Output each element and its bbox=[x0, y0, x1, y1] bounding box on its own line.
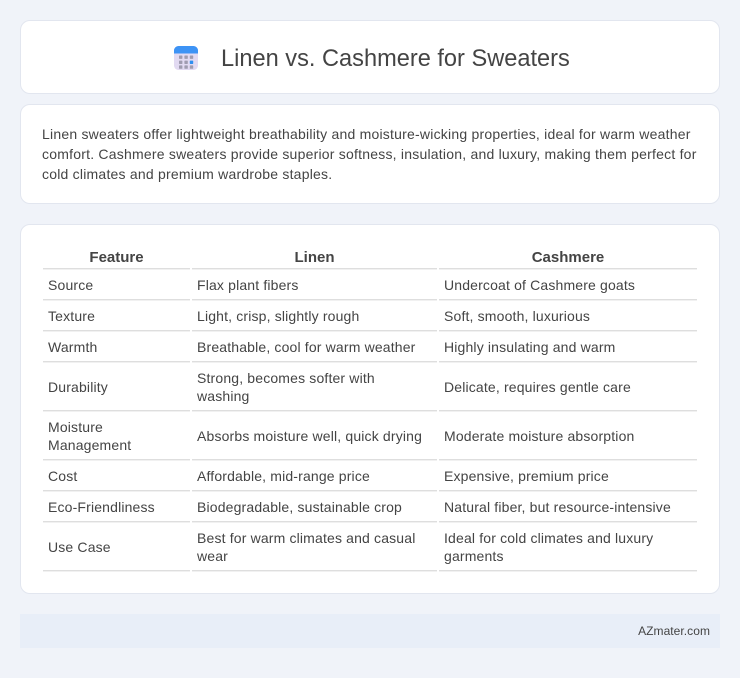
text: washing bbox=[197, 388, 250, 404]
text: Ideal for cold climates and luxury bbox=[444, 530, 653, 546]
row: Eco-Friendliness bbox=[48, 499, 671, 515]
text: Use Case bbox=[48, 539, 111, 555]
text: Flax plant fibers bbox=[197, 277, 299, 293]
text: Moisture bbox=[48, 419, 103, 435]
text: Highly insulating and warm bbox=[444, 339, 615, 355]
text: Undercoat of Cashmere goats bbox=[444, 277, 635, 293]
text: Delicate, requires gentle care bbox=[444, 379, 631, 395]
row: Cost bbox=[48, 468, 609, 484]
title: Linen vs. Cashmere for Sweaters bbox=[221, 46, 570, 72]
text: Expensive, premium price bbox=[444, 468, 609, 484]
panel: comparison table bbox=[20, 224, 720, 594]
text: Biodegradable, sustainable crop bbox=[197, 499, 402, 515]
text: Cost bbox=[48, 468, 77, 484]
text: Moderate moisture absorption bbox=[444, 428, 634, 444]
header: Linen: Linen bbox=[294, 249, 334, 266]
text: Texture bbox=[48, 308, 95, 324]
row: Warmth bbox=[48, 339, 615, 355]
text: wear bbox=[197, 548, 228, 564]
summary text bbox=[42, 126, 697, 182]
text: Best for warm climates and casual bbox=[197, 530, 415, 546]
summary text: Linen sweaters offer lightweight breathability and moisture-wicking properties, ideal for warm weather bbox=[42, 126, 691, 142]
icon: calendar bbox=[174, 46, 198, 70]
text: Soft, smooth, luxurious bbox=[444, 308, 590, 324]
text: Source bbox=[48, 277, 93, 293]
text: Breathable, cool for warm weather bbox=[197, 339, 416, 355]
comparison table bbox=[43, 249, 697, 572]
row: Durability bbox=[48, 370, 631, 404]
header: Cashmere: Cashmere bbox=[532, 249, 604, 266]
row: Use Case bbox=[48, 530, 654, 564]
row: Texture bbox=[48, 308, 590, 324]
summary text: comfort. Cashmere sweaters provide superior softness, insulation, and luxury, making them perfect for bbox=[42, 146, 697, 162]
text: Affordable, mid-range price bbox=[197, 468, 370, 484]
text: Management bbox=[48, 437, 131, 453]
text: Warmth bbox=[48, 339, 97, 355]
text: Light, crisp, slightly rough bbox=[197, 308, 359, 324]
text: Strong, becomes softer with bbox=[197, 370, 375, 386]
row: Moisture Management bbox=[48, 419, 634, 453]
text: Eco-Friendliness bbox=[48, 499, 155, 515]
text: garments bbox=[444, 548, 504, 564]
text: Natural fiber, but resource-intensive bbox=[444, 499, 671, 515]
panel: title header bbox=[20, 20, 720, 94]
panel: summary bbox=[20, 104, 720, 204]
summary text: cold climates and premium wardrobe staples. bbox=[42, 166, 332, 182]
footer credit: AZmater.com bbox=[638, 624, 710, 638]
footer bar bbox=[20, 614, 720, 648]
row: Source bbox=[48, 277, 635, 293]
header: Feature: Feature bbox=[89, 249, 144, 266]
text: Absorbs moisture well, quick drying bbox=[197, 428, 422, 444]
text: Durability bbox=[48, 379, 108, 395]
